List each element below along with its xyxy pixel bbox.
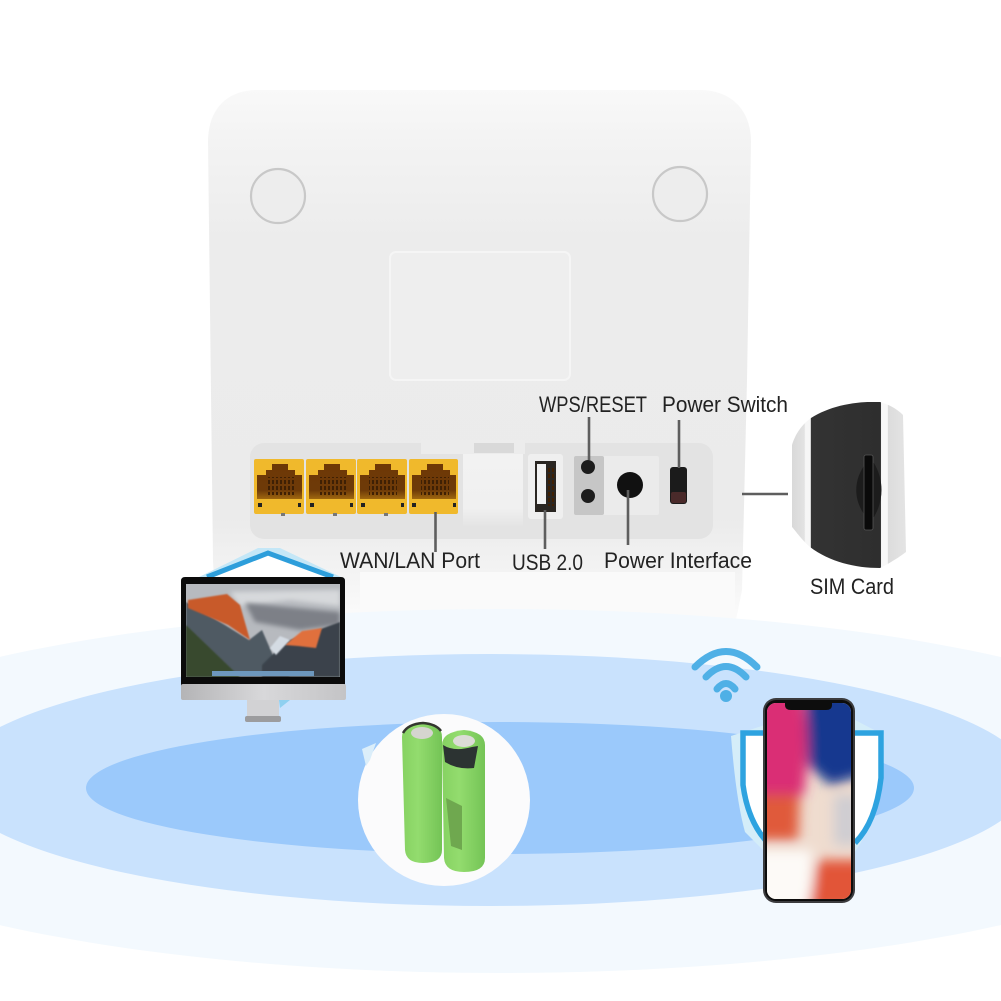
middle coverage ellipse [0,654,1001,906]
ethernet port 3 [357,459,407,516]
port panel [250,440,713,539]
label: SIM Card: SIM Card [810,574,894,599]
pale shield fragment [362,743,376,766]
notch [785,703,832,710]
label recess [390,252,570,380]
label: WAN/LAN Port: WAN/LAN Port [340,548,480,573]
battery circle [358,714,530,886]
wifi icon [695,652,757,700]
WPS button [581,460,595,474]
router body [208,90,751,625]
label: Power Interface: Power Interface [604,548,752,573]
inner coverage ellipse [86,722,914,854]
power jack [617,472,643,498]
computer with shield [181,548,346,722]
button plate [574,456,659,515]
white blanked area [463,454,523,526]
phone with shield [731,690,884,910]
bottom sheen [360,572,735,622]
monitor chin [181,684,346,700]
phone screen [767,703,851,899]
monitor bezel [181,577,345,686]
monitor foot [245,716,281,722]
shield [731,720,884,852]
battery cell left [402,723,442,863]
phone frame [763,698,855,903]
WPS plate [574,456,604,515]
panel top tab [474,443,514,453]
shield roof [197,548,343,708]
label: USB 2.0: USB 2.0 [512,550,583,575]
SIM card inset [791,402,906,568]
USB port [535,461,556,512]
SIM slot [856,455,882,530]
USB plate [528,454,563,519]
shield base fragment [279,700,290,708]
rubber foot left [251,169,305,223]
leader lines [436,417,788,552]
monitor screen [186,584,340,677]
outer coverage ellipse [0,609,1001,973]
rubber foot right [653,167,707,221]
monitor stand [247,700,279,717]
ethernet port 1 [254,459,304,516]
panel top step [421,440,525,454]
label: Power Switch: Power Switch [662,392,788,417]
power switch [670,467,687,504]
battery cell right [442,730,485,872]
ethernet port 2 [306,459,356,516]
ethernet port 4 [409,459,458,514]
reset button [581,489,595,503]
label: WPS/RESET: WPS/RESET [539,392,647,417]
